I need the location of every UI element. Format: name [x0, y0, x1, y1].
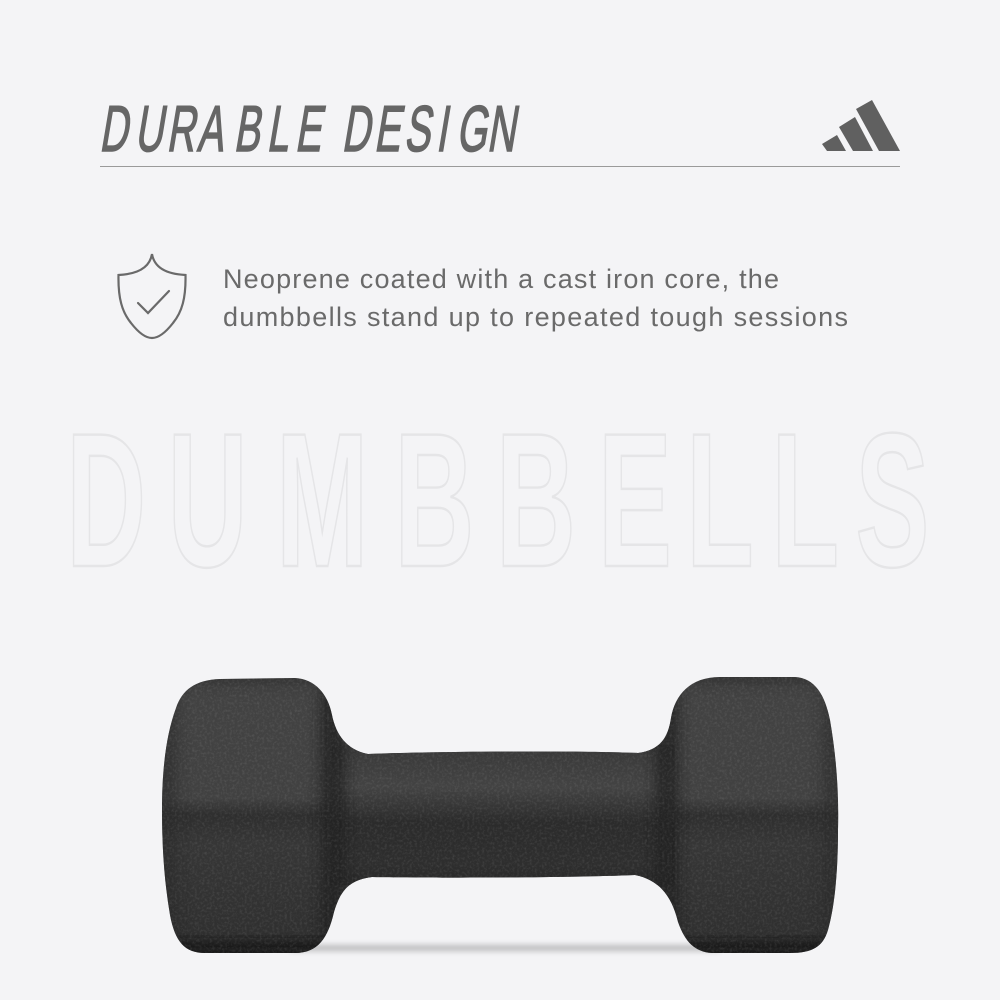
icon: brand logo three bars	[822, 100, 900, 151]
text block: description: Neoprene coated with a cast iron core, the	[223, 264, 779, 294]
icon: shield with check mark	[118, 254, 186, 338]
header rule	[100, 166, 900, 167]
watermark word: DUMBBELLS: DUMBBELLS	[66, 395, 929, 608]
dumbbell photo illustration	[150, 670, 850, 960]
text block: description: dumbbells stand up to repeated tough sessions	[223, 302, 848, 332]
floor shadow	[290, 945, 720, 951]
title: DURABLE DESIGN	[97, 93, 524, 165]
text block: description	[223, 264, 848, 332]
